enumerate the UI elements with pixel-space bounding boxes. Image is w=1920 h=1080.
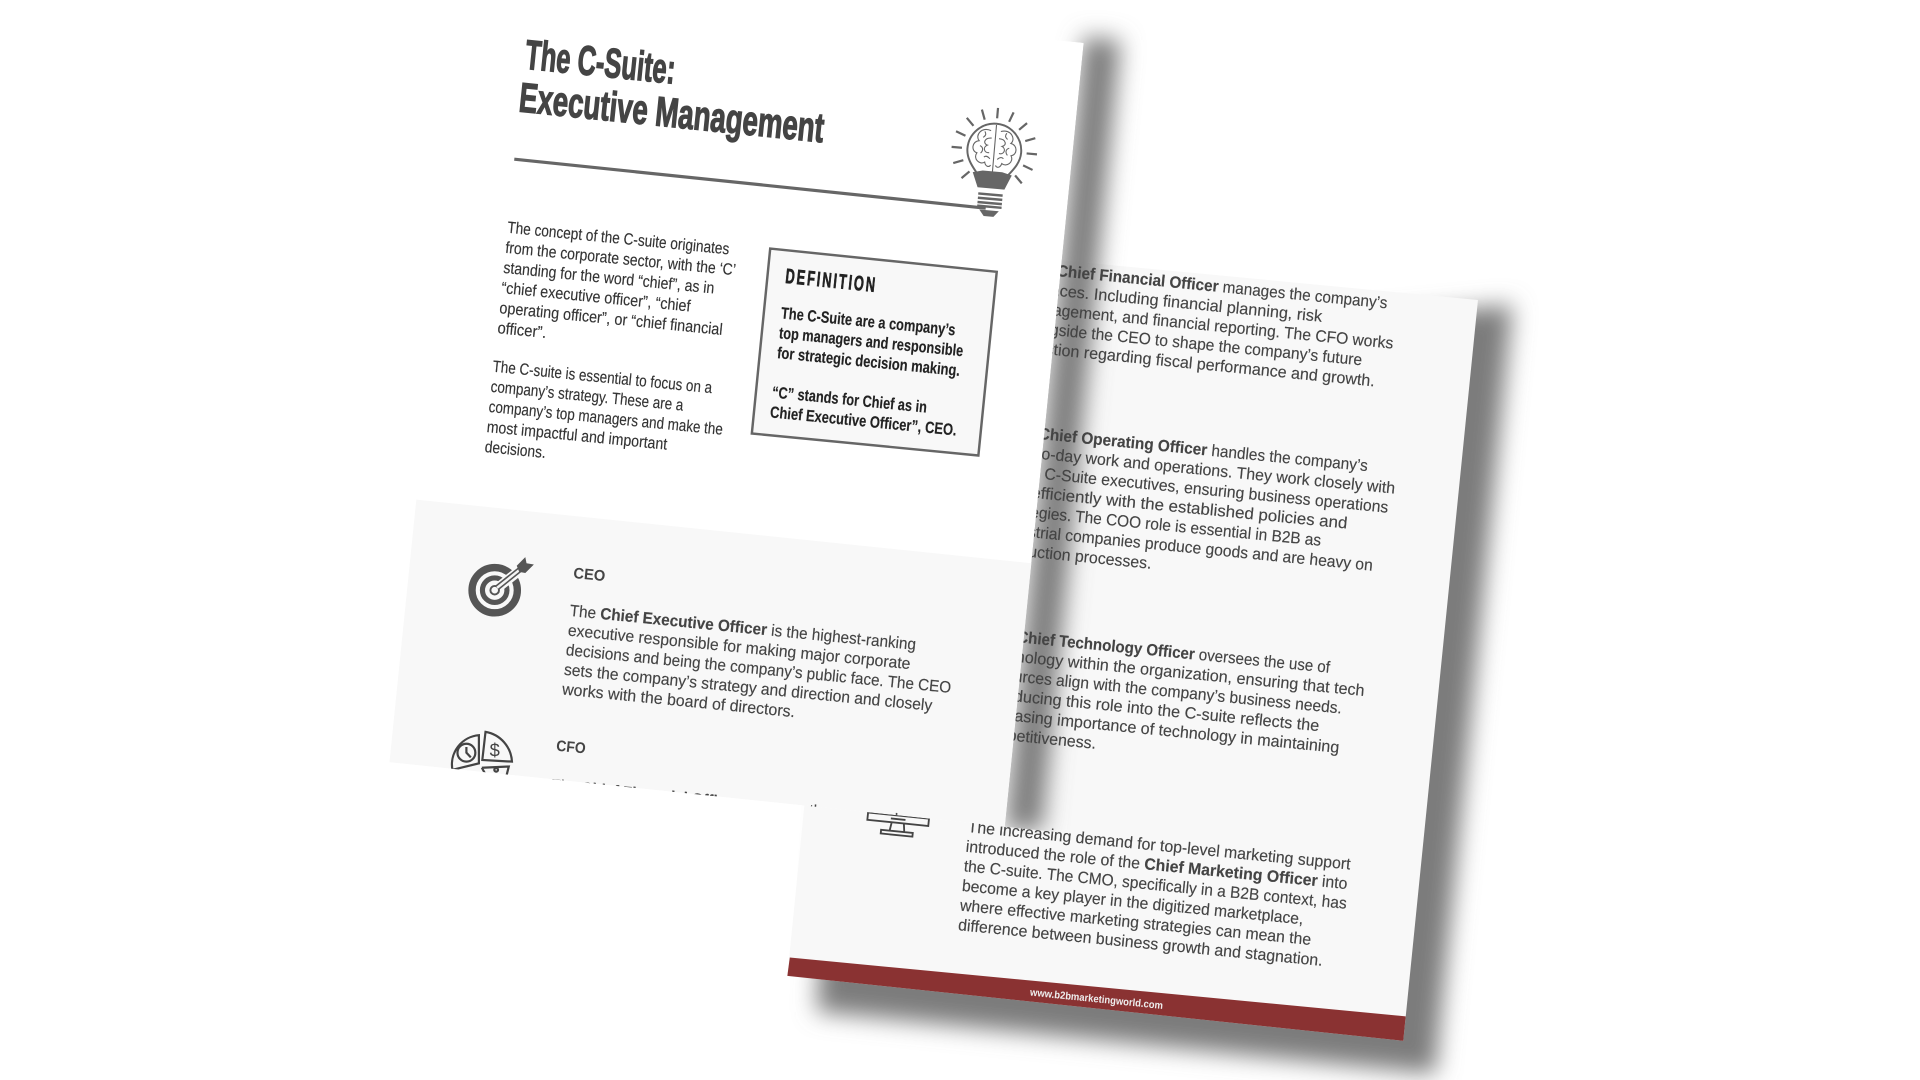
title: The C-Suite: bbox=[523, 31, 678, 93]
definition text: “C” stands for Chief as in bbox=[771, 384, 928, 417]
definition text: for strategic decision making. bbox=[776, 344, 961, 380]
back text: CMO paragraph: The increasing demand for top-level marketing support bbox=[967, 818, 1352, 874]
back text: CTO paragraph: technology within the organization, ensuring that tech bbox=[985, 645, 1365, 700]
intro paragraph two: decisions. bbox=[484, 438, 547, 462]
title rule bbox=[514, 159, 986, 208]
back text: CFO paragraph: management, and financial reporting. The CFO works bbox=[1022, 298, 1394, 353]
intro paragraph one: officer”. bbox=[497, 319, 547, 342]
front page shadow bbox=[1005, 37, 1120, 830]
CEO paragraph bbox=[562, 604, 950, 718]
intro paragraph one: The concept of the C-suite originates bbox=[507, 219, 730, 258]
intro paragraph one: standing for the word “chief”, as in bbox=[503, 259, 715, 298]
title: Executive Management bbox=[517, 74, 826, 151]
definition heading: DEFINITION bbox=[784, 265, 878, 297]
front page bbox=[450, 40, 1084, 826]
title bbox=[519, 40, 825, 143]
back text: CFO paragraph: alongside the CEO to shape the company’s future bbox=[1020, 318, 1363, 369]
CEO paragraph: executive responsible for making major corporate bbox=[567, 622, 911, 673]
back text: CTO paragraph bbox=[977, 625, 1367, 778]
intro paragraph two bbox=[485, 360, 722, 458]
intro paragraph one bbox=[498, 221, 736, 338]
intro paragraph two: company’s top managers and make the bbox=[488, 398, 724, 439]
back text: CFO paragraph: The Chief Financial Officer manages the company’s bbox=[1026, 259, 1388, 312]
back text: CTO paragraph: increasing importance of technology in maintaining bbox=[979, 704, 1340, 757]
back text: CFO paragraph bbox=[1018, 259, 1398, 392]
back text: CTO paragraph: resources align with the company’s business needs. bbox=[983, 664, 1343, 718]
CEO paragraph: works with the board of directors. bbox=[560, 680, 796, 721]
CEO heading: CEO bbox=[573, 565, 606, 585]
icon: finance dollar sign: $ bbox=[490, 740, 500, 761]
back page sheet bbox=[787, 241, 1478, 1041]
intro paragraph one: “chief executive officer”, “chief bbox=[501, 279, 692, 316]
icon: monitor bbox=[866, 812, 929, 838]
icon: light bulb brain bbox=[952, 108, 1038, 217]
intro paragraph two: company’s strategy. These are a bbox=[490, 378, 685, 415]
footer band bbox=[787, 958, 1406, 1041]
back text: CMO paragraph: become a key player in the digitized marketplace, bbox=[961, 877, 1304, 928]
back text: CTO paragraph: Introducing this role into the C-suite reflects the bbox=[981, 684, 1320, 735]
back text: COO paragraph bbox=[996, 422, 1398, 596]
icon: target bbox=[472, 557, 534, 613]
definition text: Chief Executive Officer”, CEO. bbox=[769, 403, 957, 440]
back page shadow bbox=[817, 305, 1512, 1074]
back text: CTO paragraph: competitiveness. bbox=[977, 723, 1097, 753]
back text: CMO paragraph: introduced the role of the Chief Marketing Officer into bbox=[965, 838, 1348, 893]
CEO paragraph: The Chief Executive Officer is the highest-ranking bbox=[569, 602, 917, 654]
back text: COO paragraph: industrial companies produce goods and are heavy on bbox=[998, 520, 1374, 575]
panel: definition box bbox=[752, 249, 997, 456]
definition text bbox=[769, 304, 967, 440]
CEO paragraph: decisions and being the company’s public face. The CEO bbox=[565, 641, 952, 697]
CFO heading: CFO bbox=[556, 738, 587, 757]
footer url: www.b2bmarketingworld.com bbox=[1029, 987, 1163, 1012]
back text: COO paragraph: run efficiently with the established policies and bbox=[1002, 481, 1348, 533]
back text: CFO paragraph: finances. Including financial planning, risk bbox=[1024, 279, 1324, 326]
back text: CFO paragraph: direction regarding fiscal performance and growth. bbox=[1018, 338, 1376, 390]
intro paragraph one: operating officer”, or “chief financial bbox=[499, 299, 723, 339]
definition text: top managers and responsible bbox=[778, 324, 964, 360]
back text: CMO paragraph bbox=[956, 818, 1352, 972]
back text: CMO paragraph: the C-suite. The CMO, specifically in a B2B context, has bbox=[963, 857, 1348, 913]
panel: grey executive roles bbox=[868, 563, 1032, 824]
intro paragraph two: most impactful and important bbox=[486, 418, 668, 454]
back text: COO paragraph: The Chief Operating Officer handles the company’s bbox=[1007, 422, 1369, 475]
back text: COO paragraph: production processes. bbox=[996, 540, 1152, 573]
CEO paragraph: sets the company’s strategy and direction and closely bbox=[563, 661, 934, 715]
back text: CMO paragraph: where effective marketing strategies can mean the bbox=[958, 896, 1312, 949]
CFO clipped paragraph: The Chief Financial Officer manages the company’s bbox=[551, 776, 906, 829]
back text: COO paragraph: other C-Suite executives, ensuring business operations bbox=[1004, 461, 1389, 517]
back text: COO paragraph: day-to-day work and operations. They work closely with bbox=[1005, 442, 1396, 498]
back text: CMO paragraph: difference between business growth and stagnation. bbox=[957, 916, 1323, 970]
definition text: The C-Suite are a company’s bbox=[780, 304, 956, 339]
intro paragraph one: from the corporate sector, with the ‘C’ bbox=[505, 239, 737, 279]
icon: finance pie bbox=[452, 732, 512, 781]
intro paragraph two: The C-suite is essential to focus on a bbox=[492, 358, 714, 397]
back text: COO paragraph: strategies. The COO role is essential in B2B as bbox=[1000, 500, 1322, 550]
back text: CTO paragraph: The Chief Technology Officer oversees the use of bbox=[987, 625, 1331, 677]
